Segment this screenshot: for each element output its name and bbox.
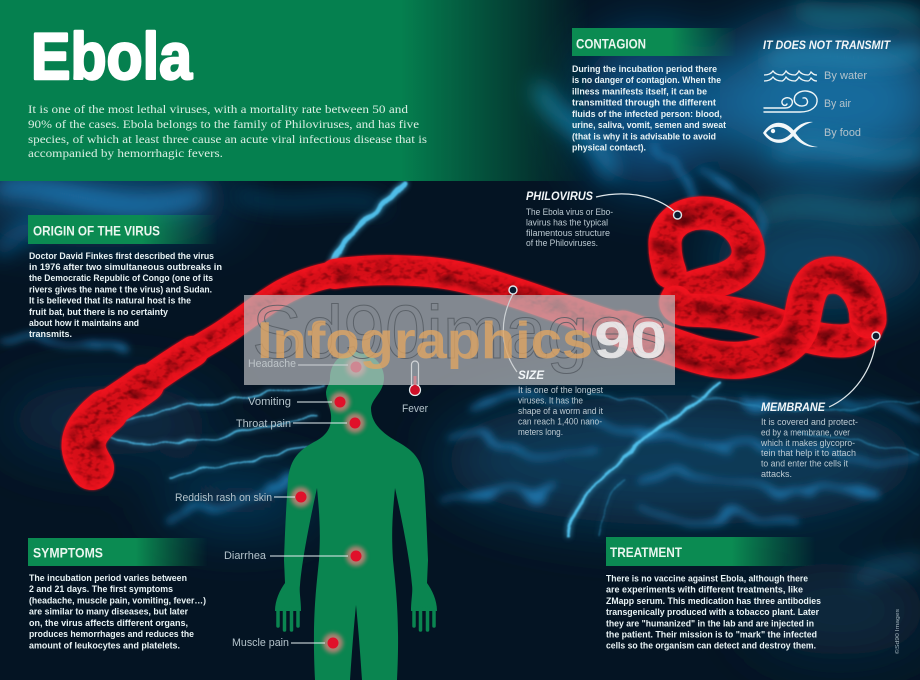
origin text: Doctor David Finkes first described the virus (29, 251, 214, 261)
treatment text (606, 574, 821, 651)
panel: contagion (572, 28, 737, 152)
symptom labels and leader lines: Muscle pain (232, 637, 289, 649)
intro text: 90% of the cases. Ebola belongs to the family of Philoviruses, and has five (28, 117, 419, 131)
symptoms text: produces hemorrhages and reduces the (29, 629, 194, 639)
contagion text: During the incubation period there (572, 64, 717, 74)
contagion text: transmitted through the different (572, 98, 716, 108)
callout: membrane: tein that help it to attach (761, 448, 856, 458)
origin text: fruit bat, but there is no certainty (29, 307, 168, 317)
callout: membrane: to and enter the cells it (761, 458, 848, 468)
icon: fish (763, 122, 818, 147)
callout: philovirus leader (596, 194, 682, 219)
contagion text: (that is why it is advisable to avoid (572, 132, 716, 142)
callout: membrane: It is covered and protect- (761, 417, 858, 427)
symptom labels and leader lines: Vomiting (248, 396, 291, 408)
origin text: in 1976 after two simultaneous outbreaks in (29, 262, 222, 272)
main filament (84, 270, 868, 468)
treatment text: ZMapp serum. This medication has three antibodies (606, 596, 821, 606)
symptom labels and leader lines: Headache (248, 358, 296, 370)
origin text: about how it maintains and (29, 318, 139, 328)
contagion text: urine, saliva, vomit, semen and sweat (572, 120, 726, 130)
callout: membrane: MEMBRANE (761, 400, 826, 414)
symptom labels and leader lines: Throat pain (236, 418, 291, 430)
intro text: It is one of the most lethal viruses, with a mortality rate between 50 and (28, 102, 408, 116)
symptoms text: on, the virus affects different organs, (29, 618, 188, 628)
callout: membrane: ed by a membrane, over (761, 428, 850, 438)
heading: origin: ORIGIN OF THE VIRUS (33, 222, 160, 238)
symptoms text: The incubation period varies between (29, 573, 187, 583)
hook of the filament (665, 213, 748, 302)
symptom labels and leader lines (175, 358, 428, 649)
label: by air: By air (824, 98, 851, 110)
marker: headache (346, 357, 366, 377)
callout: size: shape of a worm and it (518, 406, 603, 416)
panel: symptoms (28, 538, 208, 650)
panel: origin of the virus (28, 215, 222, 339)
callout: philovirus: filamentous structure (526, 228, 610, 238)
symptom labels and leader lines: Diarrhea (224, 550, 267, 562)
heading: it does not transmit: IT DOES NOT TRANSMIT (763, 38, 891, 52)
treatment text: There is no vaccine against Ebola, although there (606, 574, 808, 584)
watermark: Infographics (257, 312, 593, 370)
origin text: It is believed that its natural host is the (29, 296, 191, 306)
icon: air (764, 91, 817, 112)
treatment text: they are "humanized" in the lab and are injected in (606, 618, 814, 628)
callout: size: meters long. (518, 427, 563, 437)
bright veins (110, 184, 920, 535)
treatment text: cells so the organism can detect and destroy them. (606, 641, 816, 651)
marker: vomiting (330, 392, 350, 412)
callout: philovirus: The Ebola virus or Ebo- (526, 207, 613, 217)
callout: size: can reach 1,400 nano- (518, 416, 602, 426)
symptom markers (291, 357, 366, 653)
watermark: Sd90images (252, 290, 667, 374)
contagion text: fluids of the infected person: blood, (572, 109, 722, 119)
contagion text: is no danger of contagion. When the (572, 75, 721, 85)
contagion text (572, 64, 726, 152)
callout: size: SIZE (518, 368, 545, 382)
treatment text: the patient. Their mission is to "mark" the infected (606, 630, 817, 640)
symptoms text: (headache, muscle pain, vomiting, fever…) (29, 596, 206, 606)
symptoms text: amount of leukocytes and platelets. (29, 640, 180, 650)
contagion text: illness manifests itself, it can be (572, 86, 707, 96)
marker: rash (291, 487, 311, 507)
marker: diarrhea (346, 546, 366, 566)
callout: philovirus (526, 189, 613, 248)
symptoms text (29, 573, 206, 650)
callout: size leader (503, 286, 517, 372)
heading: contagion: CONTAGION (576, 36, 646, 52)
title: Ebola (31, 19, 193, 93)
callout: membrane (760, 400, 858, 479)
origin text (29, 251, 222, 339)
heading: treatment: TREATMENT (610, 544, 682, 560)
body silhouette (275, 352, 437, 680)
callout: size: viruses. It has the (518, 396, 583, 406)
callout: size (518, 368, 603, 437)
marker: throat pain (345, 413, 365, 433)
treatment text: transgenically produced with a tobacco plant. Later (606, 607, 819, 617)
intro text: accompanied by hemorrhagic fevers. (28, 146, 223, 160)
heading: contagion (572, 28, 737, 56)
origin text: transmits. (29, 329, 72, 339)
symptom labels and leader lines: Reddish rash on skin (175, 492, 272, 504)
header banner (0, 0, 590, 181)
soft ridges (0, 140, 920, 525)
callout: membrane: which it makes glycopro- (760, 438, 855, 448)
intro text: species, of which at least three cause an acute viral infectious disease that is (28, 132, 427, 146)
callout: philovirus: of the Philoviruses. (526, 238, 598, 248)
heading: symptoms (28, 538, 208, 566)
icon: water (764, 71, 817, 81)
label: by food: By food (824, 127, 861, 139)
icon: thermometer (410, 361, 420, 396)
origin text: the Democratic Republic of Congo (one of its (29, 273, 213, 283)
treatment text: are experiments with different treatments, like (606, 585, 803, 595)
origin text: rivers gives the name t the virus) and Sudan. (29, 284, 212, 294)
marker: muscle pain (323, 633, 343, 653)
symptom labels and leader lines: Fever (402, 403, 428, 415)
heading: treatment (606, 537, 816, 566)
label: by water: By water (824, 70, 867, 82)
watermark: 90 (594, 312, 667, 370)
lower return of the filament (676, 302, 868, 341)
callout: philovirus: PHILOVIRUS (526, 189, 593, 203)
virus filament (84, 213, 868, 468)
callout: size: It is one of the longest (518, 385, 603, 395)
callout: membrane: attacks. (761, 469, 792, 479)
heading: symptoms: SYMPTOMS (33, 544, 103, 560)
intro text (28, 102, 427, 160)
contagion text: physical contact). (572, 142, 646, 152)
symptoms text: are similar to many diseases, but later (29, 606, 188, 616)
panel: it does not transmit (763, 38, 891, 147)
callout: membrane leader (829, 332, 880, 407)
callout: philovirus: lavirus has the typical (526, 218, 608, 228)
credit: ©Sd90 Images (894, 608, 901, 654)
heading: origin (28, 215, 218, 244)
symptoms text: 2 and 21 days. The first symptoms (29, 584, 173, 594)
panel: treatment (606, 537, 821, 651)
